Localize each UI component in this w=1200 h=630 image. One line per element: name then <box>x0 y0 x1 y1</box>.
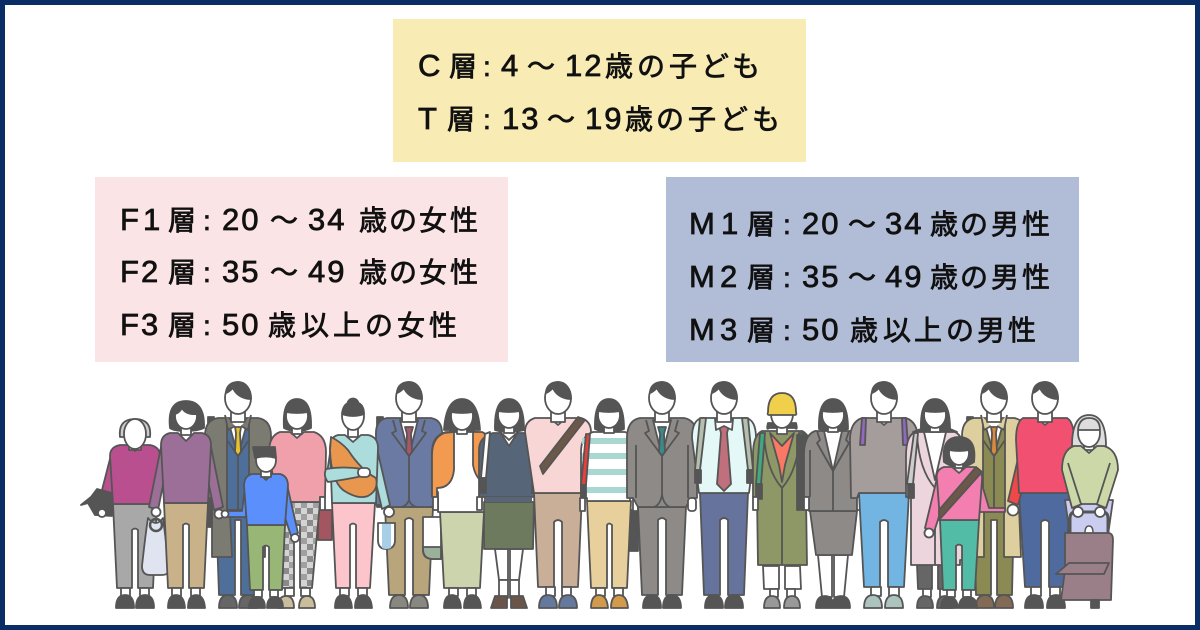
person: man in grey suit <box>627 382 697 608</box>
text: F3 segment: 性 <box>429 310 457 341</box>
text: C segment: 12 <box>565 48 603 83</box>
text: F1 segment: 20 <box>222 202 260 237</box>
text: M3 segment: 以 <box>883 315 911 346</box>
text: T segment: ど <box>720 104 748 135</box>
text: M1 segment: 20 <box>802 206 840 241</box>
text: F2 segment: 性 <box>450 257 478 288</box>
person: woman in purple sweater <box>142 401 224 608</box>
text: F1 segment: 34 <box>308 202 346 237</box>
text: T segment: の <box>656 104 684 135</box>
person: girl in pink sweater with green trousers <box>924 437 1005 608</box>
text: F1 segment: 層 <box>168 205 196 236</box>
text: M1 segment: 34 <box>885 206 923 241</box>
illustration: crowd of people <box>81 382 1118 608</box>
text: F3 segment: の <box>365 310 393 341</box>
text: M3 segment: : <box>783 315 791 346</box>
text: M2 segment: 男 <box>991 262 1019 293</box>
text: M1 segment: 〜 <box>848 209 876 240</box>
panel: men <box>666 177 1079 362</box>
text: M2 segment: 2 <box>720 259 739 294</box>
text: M1 segment: 歳 <box>930 209 958 240</box>
text: F1 segment: 性 <box>450 205 478 236</box>
person: elderly man in magenta sweater <box>81 419 160 608</box>
text: C segment: : <box>483 51 491 82</box>
text: C segment: 層 <box>449 51 477 82</box>
text: M2 segment: 49 <box>885 259 923 294</box>
text: M3 segment: の <box>946 315 974 346</box>
text: M1 segment: 男 <box>991 209 1019 240</box>
text: F2 segment: 層 <box>168 257 196 288</box>
text: M3 segment: 上 <box>914 315 942 346</box>
text: F3 segment: 女 <box>397 310 425 341</box>
text: F2 segment: 〜 <box>270 257 298 288</box>
text: M3 segment: 層 <box>747 315 775 346</box>
person: woman in olive coat and yellow hat <box>753 393 811 608</box>
text: F3 segment: 以 <box>301 310 329 341</box>
text: F3 segment: 歳 <box>268 310 296 341</box>
panel: children <box>393 19 806 162</box>
text: C segment: ど <box>701 51 729 82</box>
text: F1 segment: : <box>203 205 211 236</box>
text: M2 segment: 〜 <box>848 262 876 293</box>
text: M1 segment: 1 <box>721 206 740 241</box>
text: T segment: 歳 <box>625 104 653 135</box>
text: F3 segment: 3 <box>141 307 160 342</box>
text: M1 segment: の <box>960 209 988 240</box>
text: M3 segment: 男 <box>977 315 1005 346</box>
text: C segment: 歳 <box>605 51 633 82</box>
person: woman in striped shirt with red straps <box>580 399 638 608</box>
text: F1 segment: F <box>120 202 141 237</box>
text: F2 segment: F <box>120 254 141 289</box>
text: M3 segment: 性 <box>1008 315 1036 346</box>
text: M1 segment: M <box>689 206 717 241</box>
text: F2 segment: の <box>389 257 417 288</box>
person: boy in blue sweater <box>222 447 299 608</box>
text: C segment: 4 <box>501 48 520 83</box>
text: F3 segment: F <box>120 307 141 342</box>
person: schoolgirl in navy vest <box>477 399 541 608</box>
person: woman in pink sweater and check trousers <box>269 399 332 608</box>
person: man in grey coat and blue suit <box>205 382 271 608</box>
person: elderly woman with shopping trolley <box>1056 415 1118 608</box>
text: T segment: : <box>483 104 491 135</box>
text: C segment: 〜 <box>527 51 555 82</box>
text: F1 segment: 歳 <box>359 205 387 236</box>
person: man in pale shirt and long pink tie <box>692 382 756 608</box>
text: T segment: T <box>418 101 439 136</box>
text: M2 segment: 35 <box>802 259 840 294</box>
text: M3 segment: M <box>689 312 717 347</box>
person: woman in pale pink coat <box>906 399 964 608</box>
text: F1 segment: 女 <box>419 205 447 236</box>
text: F1 segment: の <box>389 205 417 236</box>
text: F2 segment: 歳 <box>359 257 387 288</box>
text: F2 segment: : <box>203 257 211 288</box>
text: F2 segment: 2 <box>141 254 160 289</box>
panel: women <box>95 177 508 362</box>
text: M2 segment: M <box>689 259 717 294</box>
text: F1 segment: 1 <box>143 202 162 237</box>
text: C segment: 子 <box>669 51 697 82</box>
text: T segment: 子 <box>688 104 716 135</box>
person: man in beige coat and olive suit <box>962 382 1026 608</box>
text: F1 segment: 〜 <box>270 205 298 236</box>
text: F2 segment: 49 <box>308 254 346 289</box>
text: M2 segment: 歳 <box>930 262 958 293</box>
text: M2 segment: : <box>783 262 791 293</box>
person: woman in grey suit and skirt <box>797 399 862 608</box>
person: man in taupe sweater and blue jeans <box>850 382 918 608</box>
person: man in red sweater and navy trousers <box>1008 382 1074 608</box>
text: F2 segment: 女 <box>419 257 447 288</box>
text: F3 segment: : <box>203 310 211 341</box>
text: C segment: の <box>637 51 665 82</box>
text: T segment: 13 <box>502 101 540 136</box>
person: woman in orange cardigan with tote bag <box>423 399 491 608</box>
text: M1 segment: 性 <box>1022 209 1050 240</box>
text: M2 segment: の <box>960 262 988 293</box>
text: F3 segment: 上 <box>333 310 361 341</box>
text: F3 segment: 50 <box>222 307 260 342</box>
text: T segment: 層 <box>447 104 475 135</box>
text: T segment: 〜 <box>547 104 575 135</box>
text: M1 segment: : <box>783 209 791 240</box>
text: F3 segment: 層 <box>168 310 196 341</box>
text: T segment: も <box>752 104 780 135</box>
person: man in navy blazer <box>376 382 442 608</box>
text: M1 segment: 層 <box>747 209 775 240</box>
text: M2 segment: 層 <box>747 262 775 293</box>
text: M3 segment: 3 <box>720 312 739 347</box>
text: M3 segment: 歳 <box>850 315 878 346</box>
text: C segment: C <box>418 48 442 83</box>
text: M3 segment: 50 <box>802 312 840 347</box>
person: woman with teal sweater and orange bag <box>325 398 395 608</box>
text: F2 segment: 35 <box>222 254 260 289</box>
person: man in pink sweater with messenger strap <box>525 382 591 608</box>
text: C segment: も <box>732 51 760 82</box>
text: M2 segment: 性 <box>1022 262 1050 293</box>
text: T segment: 19 <box>585 101 623 136</box>
